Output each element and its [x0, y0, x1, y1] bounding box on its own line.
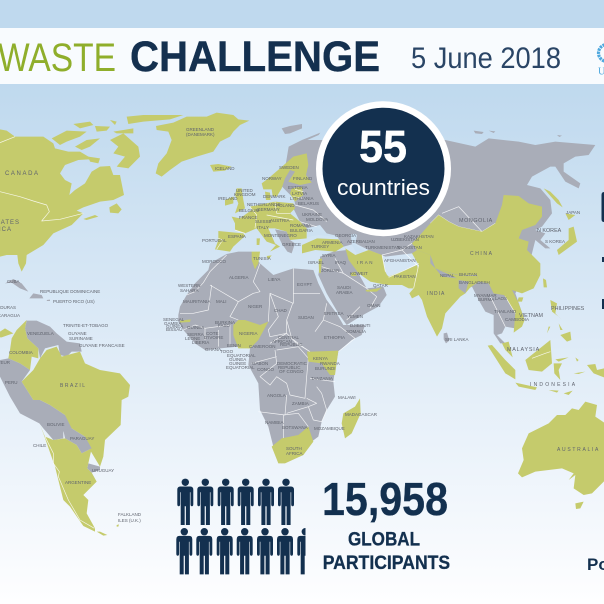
country labels: ITALY [257, 225, 269, 230]
country labels: ILES (U.K.) [118, 518, 141, 523]
header band [0, 28, 604, 84]
africa [178, 252, 365, 463]
country labels: CAMEROON [249, 344, 276, 349]
country labels: CONGO [257, 367, 274, 372]
country labels: CHAD [274, 308, 288, 313]
country labels: BOLIVIE [47, 422, 65, 427]
country labels: EGYPT [297, 282, 313, 287]
country labels: COTE [206, 331, 219, 336]
country labels: IRAN [357, 260, 374, 265]
country labels: FASO [218, 323, 231, 328]
country labels: BELGIUM [239, 208, 260, 213]
country labels: SUISSE [255, 219, 272, 224]
arabia and middle east [318, 250, 387, 325]
country labels: ESPANA [228, 234, 246, 239]
country labels: SOUTH [286, 446, 302, 451]
country labels: PORTUGAL [202, 238, 227, 243]
country labels: NAMIBIA [265, 420, 284, 425]
country labels: LIBERIA [192, 340, 209, 345]
country labels: ISRAEL [308, 260, 325, 265]
title: CHALLENGE [130, 33, 380, 81]
clipped stats at right edge [602, 192, 604, 309]
country labels: UKRAINE [302, 212, 322, 217]
south america [0, 320, 130, 536]
country labels: YEMEN [347, 314, 363, 319]
black sea and caspian [299, 226, 365, 254]
country labels: BOTSWANA [282, 425, 308, 430]
country labels: INDIA [427, 291, 445, 297]
country labels: GUYANE [68, 331, 87, 336]
stat: 15,958 global participants: 15,958 [322, 473, 448, 525]
callout: 55 countries: countries [337, 175, 430, 200]
country labels: MADAGASCAR [345, 412, 378, 417]
country labels: BURMA [478, 297, 494, 302]
country labels: SAHARA [180, 288, 199, 293]
country labels: LIBYA [268, 277, 280, 282]
title [0, 33, 380, 81]
country labels: TOGO [220, 349, 234, 354]
country labels: CENTRAL [278, 335, 300, 340]
country labels: TRINITE-ET-TOBAGO [63, 323, 109, 328]
country labels: ALGERIA [229, 275, 249, 280]
country labels: S KOREA [545, 239, 565, 244]
country labels: REPUBLIQUE DOMINICAINE [40, 289, 100, 294]
country labels: SRI LANKA [445, 337, 469, 342]
country labels: FALKLAND [118, 512, 142, 517]
australia [518, 402, 604, 509]
country labels: MALI [216, 299, 227, 304]
country labels: CHILE [33, 443, 46, 448]
country labels: EQUATORIAL [227, 353, 256, 358]
country labels: DJIBOUTI [350, 323, 371, 328]
stat: 15,958 global participants [322, 473, 450, 574]
country labels: TANZANIA [311, 376, 333, 381]
country labels: LATVIA [292, 191, 307, 196]
country labels: GUYANE FRANCAISE [79, 343, 125, 348]
country labels: MOROCCO [202, 259, 226, 264]
country labels: TUNISIA [253, 256, 271, 261]
country labels: JAPAN [566, 210, 580, 215]
world map [0, 113, 604, 536]
country labels: MOZAMBIQUE [314, 426, 345, 431]
caribbean [5, 279, 50, 301]
country labels: MALAYSIA [507, 347, 540, 353]
country labels: ZAMBIA [292, 401, 309, 406]
country labels: D'IVOIRE [204, 335, 223, 340]
country labels: GUINEA [166, 324, 183, 329]
country labels: IRAQ [335, 260, 347, 265]
country labels: BANGLADESH [459, 280, 490, 285]
country labels: NIGER [248, 304, 263, 309]
country labels: PAKISTAN [394, 274, 416, 279]
country labels: SYRIA [322, 253, 336, 258]
country labels: BRAZIL [60, 383, 87, 389]
country labels: BELARUS [298, 201, 319, 206]
country labels: QATAR [373, 283, 389, 288]
country labels: FINLAND [293, 176, 313, 181]
country labels: GABON [252, 361, 268, 366]
country labels: ANGOLA [267, 393, 286, 398]
country labels: GERMANY [257, 207, 280, 212]
country labels: TURKEY [311, 244, 329, 249]
asia green countries [302, 188, 604, 395]
country labels: NIGERIA [239, 331, 258, 336]
country labels: NEPAL [440, 273, 455, 278]
country labels: CANADA [5, 171, 40, 177]
country labels: NORWAY [262, 176, 282, 181]
country labels: GUINEA [229, 357, 246, 362]
country labels: MYANMAR [474, 293, 497, 298]
country labels: SAUDI [337, 285, 351, 290]
country labels: GHANA [205, 347, 221, 352]
country labels: BURKINA [215, 320, 235, 325]
country labels: REPUBLIC [278, 365, 301, 370]
country labels: LAOS [495, 296, 507, 301]
country labels: CAMBODIA [505, 317, 529, 322]
country labels: GUINEE [229, 361, 246, 366]
country labels: PHILIPPINES [551, 306, 585, 312]
country labels: ARABIA [336, 290, 353, 295]
country labels: ARMENIA [322, 240, 343, 245]
country labels: MAURITANIA [183, 299, 210, 304]
europe [215, 150, 367, 259]
country labels: OF CONGO [279, 369, 304, 374]
country labels: SOMALIA [346, 329, 366, 334]
country labels: GUINEA [187, 325, 204, 330]
stat: 15,958 global participants: GLOBAL [348, 529, 420, 551]
country labels: RWANDA [320, 361, 340, 366]
country labels: ESTONIA [288, 185, 308, 190]
country labels: INDONESIA [530, 382, 577, 388]
country labels: BURUNDI [315, 366, 336, 371]
country labels: BENIN [227, 343, 241, 348]
country labels: VENEZUELA [27, 331, 54, 336]
country labels: PUERTO RICO (US) [53, 299, 95, 304]
country labels: N KOREA [537, 228, 562, 234]
country labels: MONTENEGRO [264, 233, 297, 238]
country labels: THAILAND [494, 309, 517, 314]
country labels: EQUATORIAL [226, 365, 255, 370]
country labels: OMAN [367, 303, 380, 308]
country labels: UNITED [236, 188, 254, 193]
country labels: GREENLAND [186, 127, 215, 132]
country labels: CHINA [470, 251, 494, 257]
country labels: GREECE [282, 242, 301, 247]
asia base [282, 131, 595, 343]
country labels: SIERRA [187, 332, 204, 337]
country labels: MONGOLIA [459, 218, 493, 224]
country labels: CUBA [7, 279, 20, 284]
icons: people rows [176, 479, 313, 574]
callout: 55 countries: 55 [359, 121, 407, 172]
country labels: TURKMENISTAN [365, 245, 400, 250]
stat: 15,958 global participants: PARTICIPANTS [323, 552, 450, 574]
country labels: LEONE [185, 336, 200, 341]
north america [0, 115, 183, 272]
country labels: BISSAU [166, 327, 183, 332]
country labels: KOWEIT [350, 271, 368, 276]
country labels: AUSTRIA [270, 218, 290, 223]
country labels: VIETNAM [519, 313, 543, 319]
country labels: SURINAME [69, 336, 93, 341]
country labels [0, 127, 600, 523]
country labels: POLAND [276, 203, 295, 208]
country labels: PERU [5, 380, 18, 385]
country labels: MALAWI [338, 395, 356, 400]
country labels: DENMARK [263, 194, 286, 199]
country labels: MOLDOVA [306, 217, 328, 222]
country labels: IRELAND [218, 196, 238, 201]
country labels: ARGENTINE [65, 480, 91, 485]
country labels: (DANEMARK) [186, 132, 215, 137]
country labels: TAJIKISTAN [397, 245, 422, 250]
country labels: AFGHANISTAN [384, 258, 416, 263]
country labels: ERITREA [324, 311, 344, 316]
country labels: GAMBIA [164, 321, 182, 326]
country labels: KAZAKHSTAN [404, 234, 434, 239]
country labels: NETHERLANDS [247, 202, 281, 207]
country labels: SWEDEN [279, 165, 299, 170]
icon: un logo [598, 44, 604, 78]
country labels: JORDAN [321, 268, 340, 273]
country labels: KENYA [313, 356, 328, 361]
country labels: AZERBAIJAN [347, 239, 375, 244]
date: 5 June 2018 [411, 42, 561, 75]
country labels: SENEGAL [163, 317, 185, 322]
country labels: ICELAND [215, 166, 235, 171]
country labels: FRANCE [239, 215, 258, 220]
country labels: DEMOCRATIC [277, 361, 308, 366]
country labels: LITHUANIA [290, 196, 314, 201]
country labels: COLOMBIA [9, 350, 33, 355]
country labels: AUSTRALIA [557, 447, 600, 453]
country labels: SUDAN [298, 315, 314, 320]
country labels: AFRICAN [272, 339, 292, 344]
title: WASTE [0, 36, 116, 80]
country labels: GEORGIA [335, 233, 356, 238]
country labels: REPUBLIC [280, 342, 303, 347]
country labels: AFRICA [286, 451, 303, 456]
country labels: KINGDOM [234, 192, 256, 197]
country labels: URUGUAY [92, 468, 114, 473]
country labels: PARAGUAY [70, 436, 94, 441]
top band [0, 0, 604, 28]
country labels: BHUTAN [459, 272, 477, 277]
country labels: ROMANIA [290, 223, 311, 228]
country labels: ETHIOPIA [324, 335, 345, 340]
callout: 55 countries [316, 101, 451, 236]
country labels: UZBEKISTAN [391, 237, 419, 242]
greenland and iceland [156, 113, 302, 177]
country labels: BULGARIA [290, 228, 313, 233]
country labels: WESTERN [178, 283, 200, 288]
